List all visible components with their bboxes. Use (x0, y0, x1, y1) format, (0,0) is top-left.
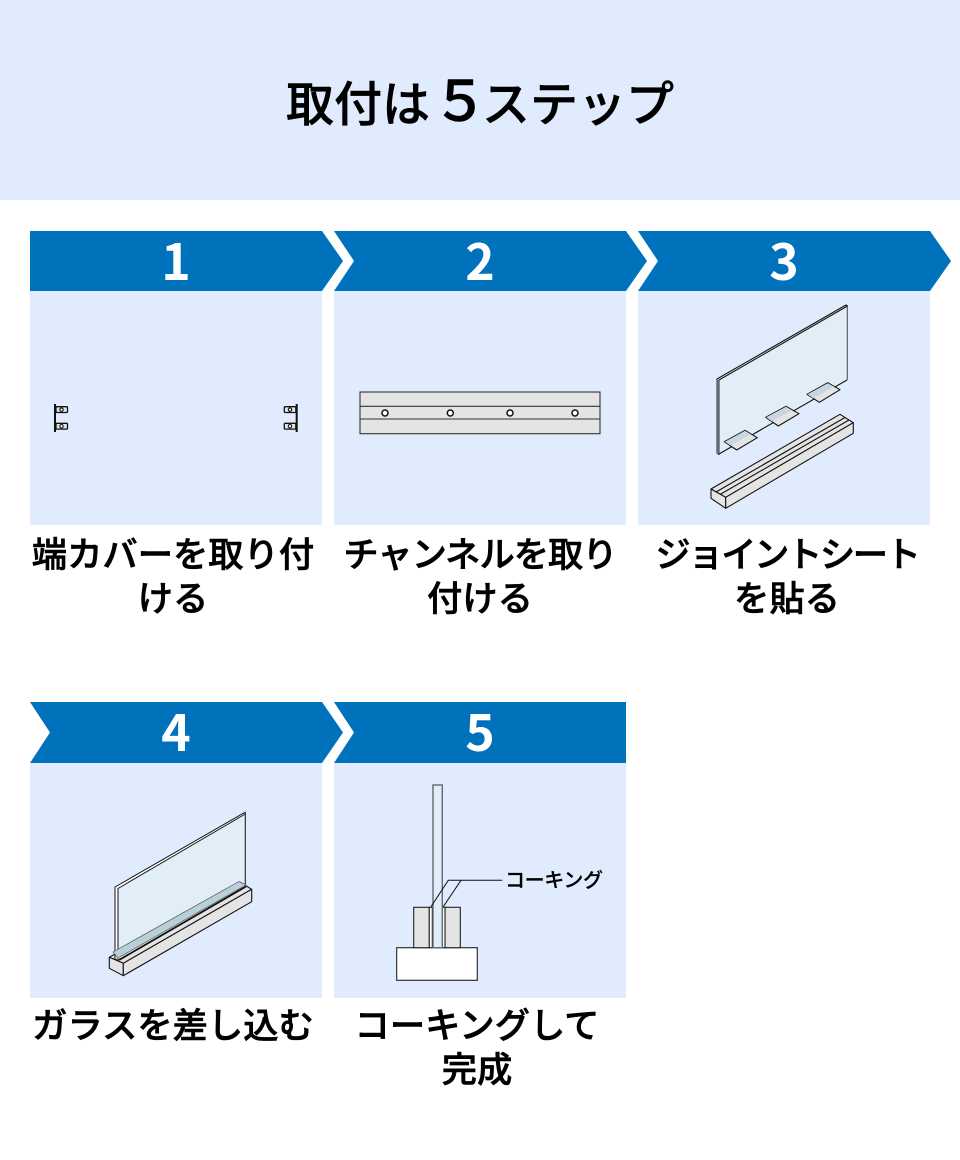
caption: step 5 (355, 998, 599, 1093)
arrow: step 4: 4 (161, 694, 191, 766)
icon: right end cover (284, 404, 297, 432)
caption: step 5: コーキングして (355, 998, 599, 1049)
caption: step 4: ガラスを差し込む (32, 998, 314, 1049)
caption: step 5: 完成 (442, 1042, 512, 1093)
title banner (0, 0, 960, 200)
icon: left end cover (55, 404, 68, 432)
arrow: step 4 (30, 694, 343, 766)
panel: step 4 background (30, 763, 322, 998)
arrow: step 5 (334, 694, 626, 766)
illustration: caulking cross-section (397, 785, 502, 980)
caption: step 1: ける (138, 571, 208, 622)
illustration: glass inserted in channel (109, 812, 252, 976)
caption: step 2: チャンネルを取り (343, 527, 617, 578)
illustration: glass with joint sheets above channel (711, 305, 853, 508)
caption: step 3: を貼る (734, 571, 840, 622)
title banner: ５ (432, 57, 488, 138)
arrow: step 2: 2 (465, 223, 495, 295)
caption: step 2 (343, 527, 617, 622)
arrow: step 5: 5 (465, 694, 495, 766)
caption: step 1 (32, 527, 314, 622)
label: caulking: コーキング (505, 864, 603, 893)
arrow: step 1 (30, 223, 343, 295)
caption: step 3 (655, 527, 919, 622)
arrow: step 3 (638, 223, 951, 295)
caption: step 3: ジョイントシート (655, 527, 919, 578)
panel: step 5 background (334, 763, 626, 998)
caption: step 1: 端カバーを取り付 (32, 527, 314, 578)
arrow: step 3: 3 (769, 223, 799, 295)
title banner: 取付は ステップ (286, 65, 674, 135)
caption: step 2: 付ける (427, 571, 533, 622)
arrow: step 1: 1 (161, 223, 191, 295)
panel: step 3 background (638, 291, 930, 525)
panel: step 1 background (30, 291, 322, 525)
panel: step 2 background (334, 291, 626, 525)
arrow: step 2 (334, 223, 647, 295)
illustration: channel with holes (360, 392, 600, 434)
